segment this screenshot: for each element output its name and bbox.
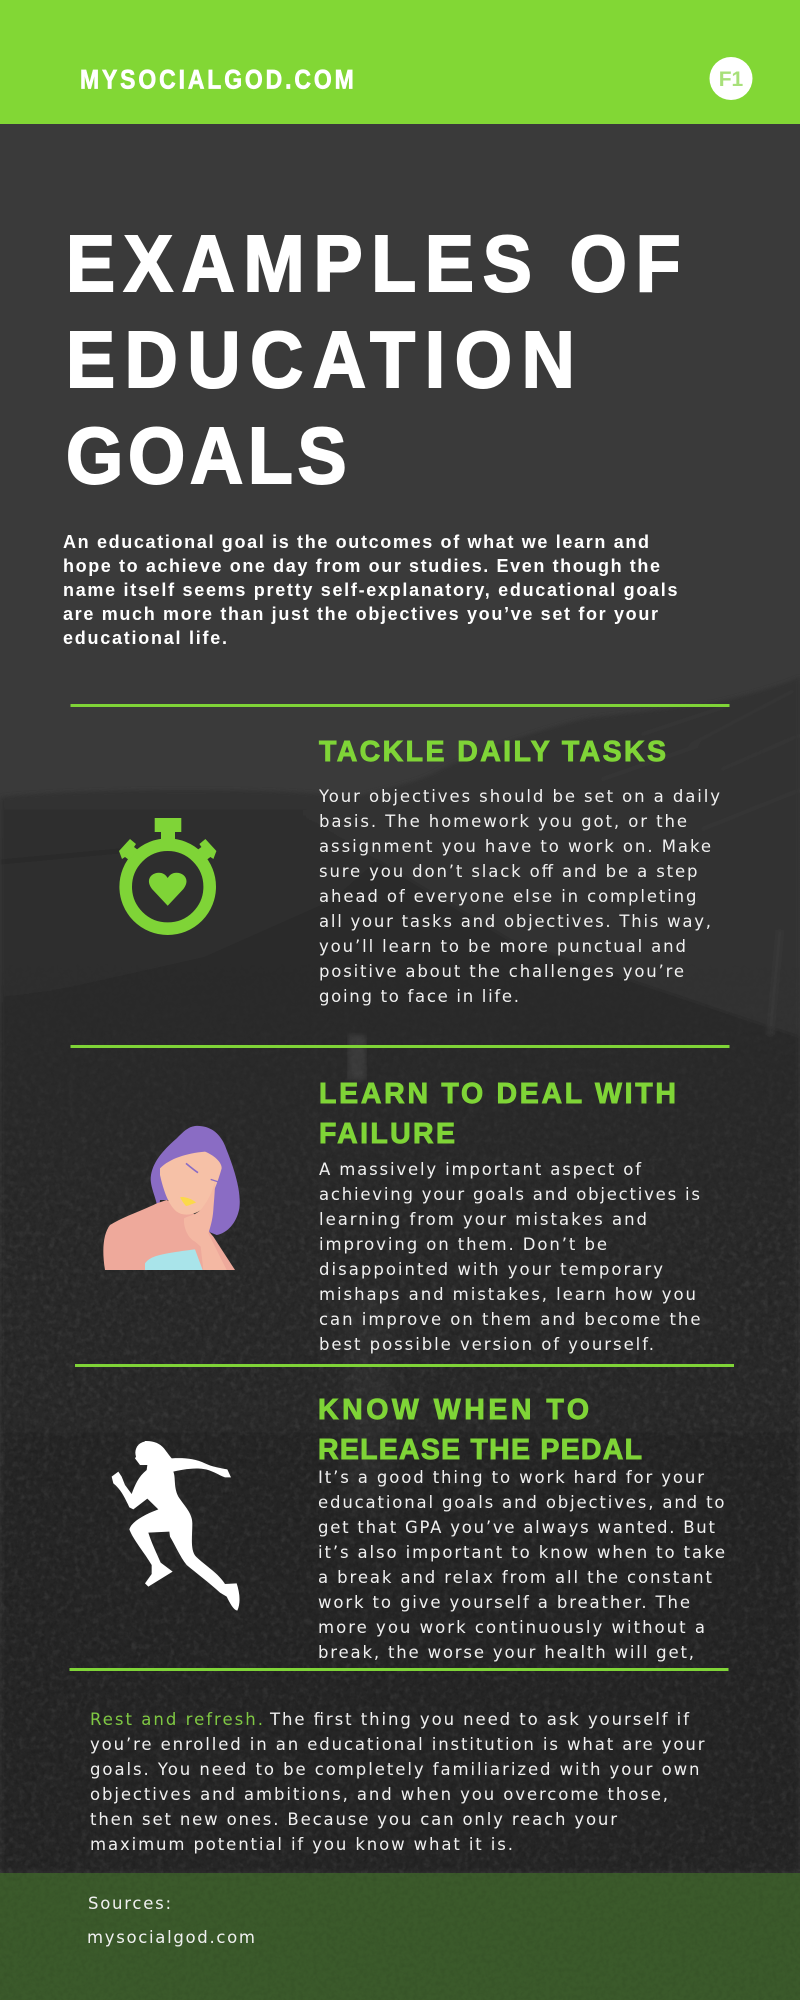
panel: know when to release the pedal [112,1394,725,1662]
body text: it’s also important to know when to take [318,1543,725,1562]
intro paragraph [63,532,677,648]
F1 badge [710,57,752,100]
heading: KNOW WHEN TO [318,1394,589,1426]
panel: tackle daily tasks [119,736,720,1006]
body text: educational goals and objectives, and to [318,1493,724,1512]
body text: A massively important aspect of [319,1160,642,1179]
footer band [0,1873,800,2000]
body text: Your objectives should be set on a daily [318,787,720,806]
divider 4 [70,1668,728,1671]
closing paragraph: goals. You need to be completely familiarized with your own [90,1760,700,1779]
body text: ahead of everyone else in completing [319,887,696,906]
body text: basis. The homework you got, or the [319,812,687,831]
body text: work to give yourself a breather. The [318,1593,690,1612]
body text: learning from your mistakes and [319,1210,647,1229]
body text [318,787,720,1006]
body text: best possible version of yourself. [319,1335,654,1354]
header bar [0,0,800,124]
intro paragraph: are much more than just the objectives you’ve set for your [63,604,658,624]
body text [319,1160,700,1354]
body text: sure you don’t slack off and be a step [319,862,698,881]
intro paragraph: name itself seems pretty self-explanatory, educational goals [63,580,677,600]
closing paragraph: you’re enrolled in an educational institution is what are your [90,1735,705,1754]
heading [319,1078,676,1150]
closing paragraph: objectives and ambitions, and when you overcome those, [90,1785,668,1804]
intro paragraph: hope to achieve one day from our studies. Even though the [63,556,660,576]
heading [318,1394,642,1466]
body text: mishaps and mistakes, learn how you [319,1285,696,1304]
sources: Sources: [88,1894,171,1913]
body text [318,1468,725,1662]
body text: It’s a good thing to work hard for your [318,1468,704,1487]
body text: more you work continuously without a [318,1618,705,1637]
body text: assignment you have to work on. Make [319,837,711,856]
title: EDUCATION [66,315,575,405]
intro paragraph: educational life. [63,628,227,648]
body text: going to face in life. [319,987,519,1006]
closing paragraph: The first thing you need to ask yourself if [269,1710,690,1729]
icon: running woman silhouette [112,1441,240,1611]
body text: all your tasks and objectives. This way, [319,912,711,931]
highlighted phrase: Rest and refresh. [90,1710,263,1729]
icon: stopwatch with heart [119,818,216,929]
closing paragraph [90,1710,705,1854]
title: EXAMPLES OF [66,219,681,309]
body text: get that GPA you’ve always wanted. But [318,1518,716,1537]
closing paragraph: maximum potential if you know what it is. [90,1835,513,1854]
body text: positive about the challenges you’re [319,962,684,981]
body text: improving on them. Don’t be [319,1235,607,1254]
title: GOALS [66,411,347,501]
icon: thoughtful woman [103,1126,240,1270]
sources [87,1894,255,1947]
body text: you’ll learn to be more punctual and [319,937,686,956]
heading: FAILURE [319,1118,455,1150]
body text: disappointed with your temporary [319,1260,663,1279]
title [66,219,681,501]
divider 3 [75,1364,734,1367]
panel: learn to deal with failure [103,1078,700,1354]
closing paragraph: then set new ones. Because you can only reach your [90,1810,617,1829]
body text: a break and relax from all the constant [318,1568,713,1587]
body text: achieving your goals and objectives is [319,1185,700,1204]
heading: LEARN TO DEAL WITH [319,1078,676,1110]
body text: can improve on them and become the [319,1310,700,1329]
heading: RELEASE THE PEDAL [318,1434,642,1466]
sources: mysocialgod.com [87,1928,255,1947]
intro paragraph: An educational goal is the outcomes of what we learn and [63,532,649,552]
divider 1 [70,704,730,707]
body text: break, the worse your health will get, [318,1643,694,1662]
heading: TACKLE DAILY TASKS [319,736,666,768]
brand name: MYSOCIALGOD.COM [80,65,354,95]
divider 2 [70,1045,730,1048]
F1 badge: F1 [719,68,744,91]
